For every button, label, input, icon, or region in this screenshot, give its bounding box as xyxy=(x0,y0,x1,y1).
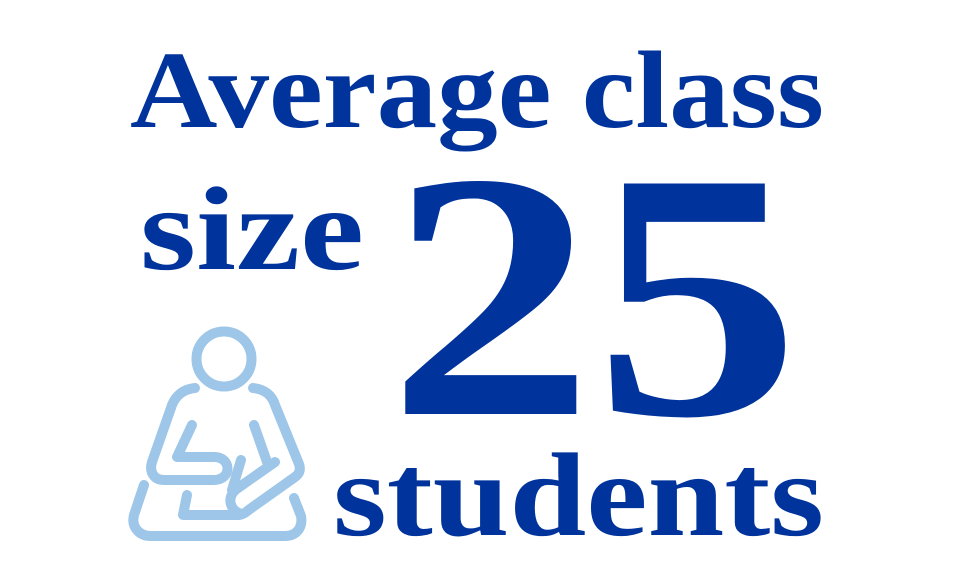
label: size: size xyxy=(140,163,364,295)
icon: student reading a book, seated xyxy=(133,332,301,536)
heading: Average class: Average class xyxy=(130,29,824,151)
label: students: students xyxy=(333,429,824,561)
number: 25: 25 xyxy=(388,101,800,491)
